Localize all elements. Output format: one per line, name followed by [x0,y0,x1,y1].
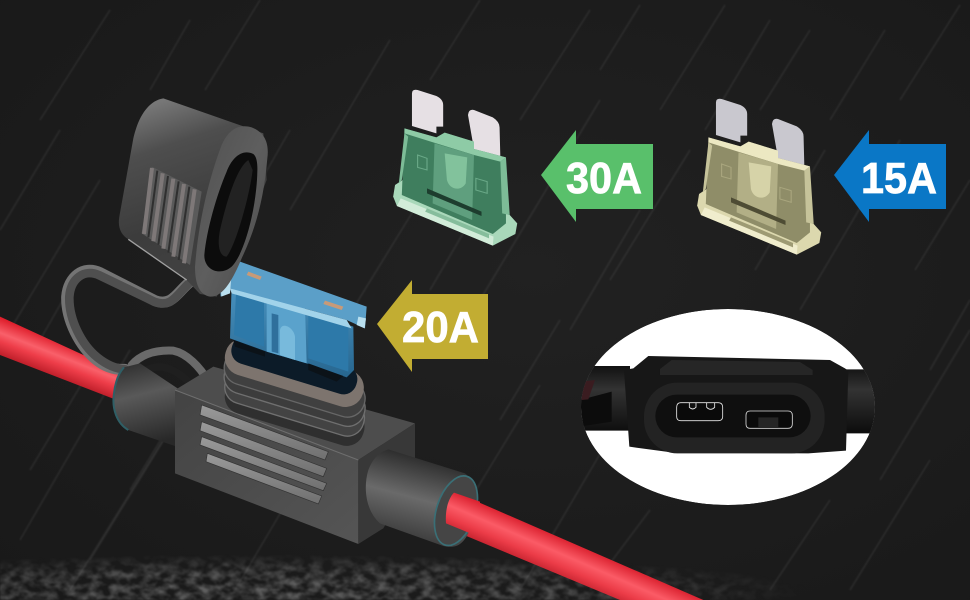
left red wire [0,317,123,399]
blue arrow [834,130,946,222]
inset photo: fuse holder terminals [580,309,878,505]
left sleeve [113,363,180,447]
cap opening [204,152,257,271]
cap front rim [195,126,268,297]
ground noise band [0,558,748,600]
right red wire [440,488,703,600]
green 30A fuse [393,90,517,246]
box ribs [200,405,328,504]
label 20A: 20A [402,303,479,352]
right terminal slot [746,411,792,428]
fuse holder illustration [0,98,703,600]
gasket rings [220,332,369,450]
connector body [624,356,848,453]
30A callout [541,130,653,222]
cable stubs [580,366,878,433]
white oval backdrop [581,309,875,505]
20A callout [377,280,488,372]
left terminal slot [677,403,723,421]
gold arrow [377,280,488,372]
tether strap [67,270,208,382]
waterproof cap [119,98,268,297]
blue 20A fuse [219,262,367,382]
label 30A: 30A [566,154,642,203]
yellow 15A fuse [697,99,821,255]
15A callout [834,130,946,222]
terminal recess [644,383,825,453]
right sleeve [366,449,486,551]
green arrow [541,130,653,222]
holder box [175,367,415,544]
cap grip ribs [142,167,202,265]
label 15A: 15A [861,154,937,203]
